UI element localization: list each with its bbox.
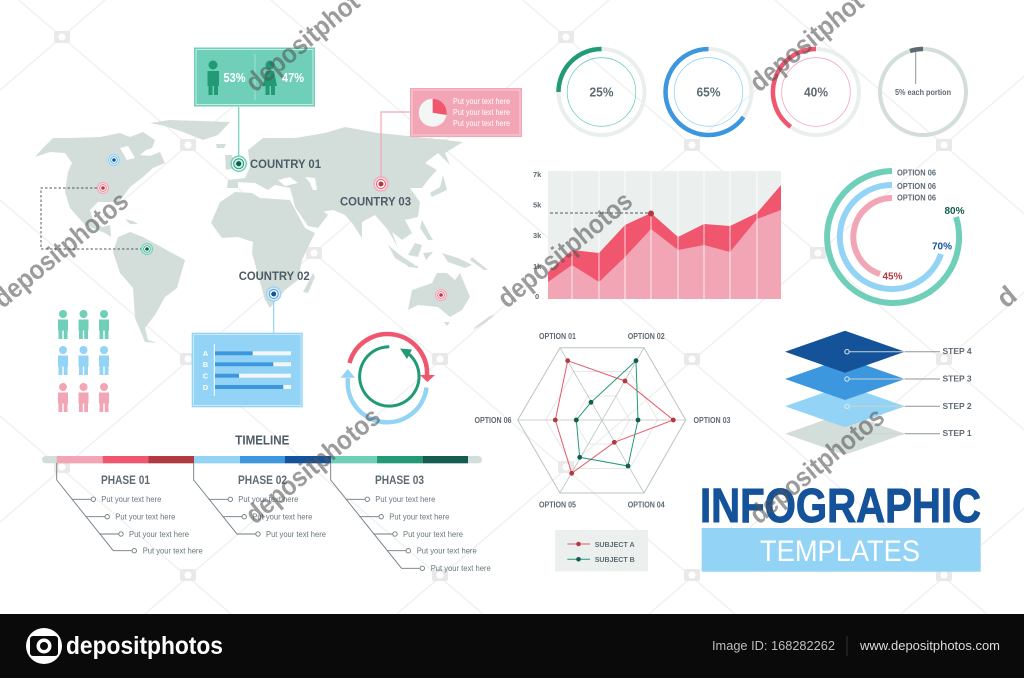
marker: country 02 [267,287,281,301]
radar chart: OPTION 02 [628,332,665,341]
phase 02: Put your text here [252,512,313,522]
callout: pie text: Put your text here [453,119,510,128]
phase 03 [331,463,491,573]
area chart [533,170,781,301]
phase 01: Put your text here [129,529,189,539]
radar legend [555,530,648,572]
stacked steps diagram: STEP 2 [942,401,972,411]
concentric arc labels: OPTION 06 [897,182,937,191]
phase 03: Put your text here [431,563,491,573]
ring gauge 65% [666,49,752,135]
phase 01: Put your text here [115,512,176,522]
ring gauge 25%: 25% [590,84,614,100]
connector: country 01 [238,107,240,157]
callout: gender split: 53% [224,71,246,85]
ring gauge 25% [558,49,644,135]
phase 01: Put your text here [143,546,203,556]
label: country 03: COUNTRY 03 [340,194,411,208]
phase 01: Put your text here [101,494,162,504]
radar chart: OPTION 03 [694,416,731,425]
phase 02: Put your text here [266,529,326,539]
radar chart [474,332,731,510]
ring gauge 40% [773,49,859,135]
callout: gender split [194,48,315,106]
watermarks: depositphotos [240,402,386,530]
label: country 01: COUNTRY 01 [250,157,321,171]
cycle arrows [341,334,435,422]
footer bar: www.depositphotos.com [859,638,1000,653]
area chart: 7k [533,170,542,179]
dashed route [41,188,141,249]
callout: pie text [410,88,522,137]
callout: pie text: Put your text here [453,108,510,117]
concentric arc labels [882,168,965,282]
radar legend: SUBJECT B [595,555,635,564]
radar legend: SUBJECT A [595,540,635,549]
marker: country 03 [374,177,388,191]
ring gauge 5% each portion: 5% each portion [895,88,951,97]
footer bar: depositphotos [66,632,223,660]
watermarks: depositphotos [492,186,638,314]
stacked steps diagram: STEP 4 [942,346,972,356]
marker: north america blue [108,154,120,166]
callout: bar chart panel: A [203,349,209,358]
phase 03: Put your text here [375,494,436,504]
marker: north america red [98,182,108,194]
concentric arc labels: OPTION 06 [897,168,937,178]
area chart: 3k [533,231,542,240]
watermarks [0,0,1023,530]
radar chart: OPTION 04 [628,500,665,510]
area chart: 1k [533,262,542,271]
watermarks: depositphotos [744,402,890,530]
marker: country 01 [231,156,246,171]
concentric arc labels: 70% [932,242,952,252]
watermarks: d [991,280,1023,314]
stacked steps diagram: STEP 1 [942,428,972,438]
phase 03: Put your text here [403,529,463,539]
label: country 02: COUNTRY 02 [239,269,310,283]
stacked steps diagram: STEP 3 [942,374,972,384]
callout: bar chart panel [192,333,303,407]
stacked steps diagram [785,331,972,455]
callout: bar chart panel: C [203,372,209,380]
callout: pie text: Put your text here [453,97,510,106]
radar chart: OPTION 01 [539,332,576,341]
phase 02: PHASE 02 [238,473,287,487]
connector: country 03 [381,112,410,177]
subtitle banner [702,528,981,572]
phase 01 [57,463,203,556]
footer bar [0,614,1024,678]
callout: bar chart panel: B [203,360,209,369]
concentric progress arcs [827,171,959,303]
ring gauge 5% each portion [880,49,966,135]
connector: country 02 [273,301,275,333]
marker: australia red [436,290,446,300]
marker: south america green [142,244,152,254]
timeline heading: TIMELINE [235,432,290,448]
phase 01: PHASE 01 [101,473,150,487]
concentric arc labels: 45% [882,272,903,282]
phase 03: Put your text here [417,546,477,556]
ring gauge 40%: 40% [804,84,828,100]
area chart: 0 [535,292,539,301]
timeline bar [42,456,482,463]
area chart: 5k [533,200,542,210]
world map [35,120,495,343]
concentric arc labels: 80% [944,206,965,217]
concentric arc labels: OPTION 06 [897,194,937,202]
ring gauge 65%: 65% [696,84,721,100]
radar chart: OPTION 06 [474,416,512,425]
people icons grid [58,310,109,412]
phase 02: Put your text here [238,494,299,504]
footer bar: Image ID: 168282262 [712,638,835,653]
callout: gender split: 47% [282,71,304,85]
phase 03: Put your text here [389,512,450,522]
radar chart: OPTION 05 [539,500,576,510]
phase 02 [194,463,326,539]
subtitle banner: TEMPLATES [760,535,920,568]
phase 03: PHASE 03 [375,473,424,487]
callout: bar chart panel: D [203,383,209,392]
